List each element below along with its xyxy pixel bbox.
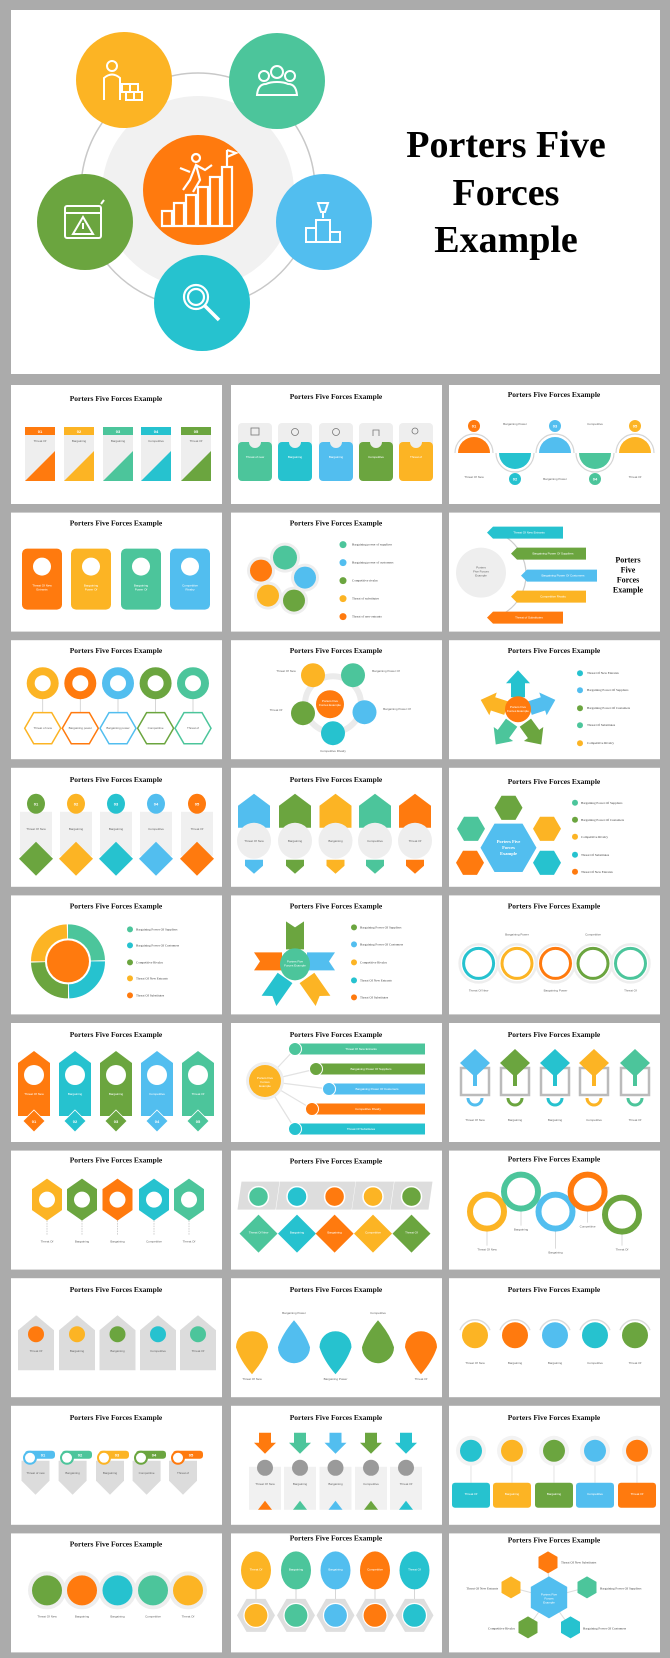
thumbnail 29: ellipses over hexagons: Bargaining (289, 1567, 304, 1571)
thumbnail 20: parallelograms and diamonds (231, 1151, 442, 1270)
thumbnail 17: horizontal bars: Competitive Rivalry (355, 1107, 381, 1111)
thumbnail 16: tall arrow cards: 03 (114, 1119, 119, 1124)
thumbnail 26: down arrows: Porters Five Forces Example (290, 1413, 383, 1422)
thumbnail 1: numbered cards: Bargaining (72, 439, 87, 443)
thumbnail 16: tall arrow cards: 05 (196, 1119, 201, 1124)
thumbnail 12: hexagon cluster: Forces (502, 845, 515, 850)
thumbnail 25: tags: Porters Five Forces Example (70, 1413, 163, 1422)
thumbnail 10: numbers and diamonds (11, 768, 222, 887)
thumbnail 27: circles over boxes (449, 1406, 660, 1525)
thumbnail 16: tall arrow cards: 02 (73, 1119, 78, 1124)
thumbnail 12: hexagon cluster: Porters Five (497, 839, 520, 844)
thumbnail 21: overlapping thick rings: Threat Of (616, 1248, 629, 1252)
thumbnail 9: arrows around center: Threat Of New Entrants (587, 671, 619, 675)
thumbnail 26: down arrows: Threat Of New (255, 1482, 276, 1486)
thumbnail 6: arrow banners: Competitive Rivalry (540, 595, 566, 599)
thumbnail 16: tall arrow cards: 01 (32, 1119, 37, 1124)
thumbnail 28: haloed circles: Bargaining (75, 1614, 90, 1618)
thumbnail 25: tags: 05 (189, 1452, 194, 1457)
thumbnail 1: numbered cards: Porters Five Forces Example (70, 394, 163, 403)
thumbnail 18: diamonds over frames: Threat Of New (465, 1118, 486, 1122)
thumbnail 23: drops: Competitive (370, 1311, 386, 1315)
thumbnail 16: tall arrow cards: Competitive (149, 1092, 165, 1096)
circle: rivalry podium (276, 174, 372, 270)
thumbnail 11: up pentagons: Competitive (367, 839, 383, 843)
thumbnail 21: overlapping thick rings: Bargaining (514, 1228, 529, 1232)
thumbnail 14: ribbon star: Competitive Rivalry (360, 960, 387, 964)
thumbnail 1: numbered cards: Threat Of (34, 439, 47, 443)
thumbnail 30: hexagon network: Forces (544, 1596, 554, 1600)
thumbnail 4: four rounded cards: Porters Five Forces Example (70, 519, 163, 528)
thumbnail 1: numbered cards: Threat Of (190, 439, 203, 443)
thumbnail 4: four rounded cards: Threat Of New (32, 584, 53, 588)
thumbnail 22: gray houses: Bargaining (70, 1349, 85, 1353)
thumbnail 25: tags: Threat of new (26, 1471, 46, 1475)
thumbnail 8: central circle: Porters Five (322, 699, 338, 703)
thumbnail 8: central circle: Bargaining Power Of (372, 669, 400, 673)
thumbnail 27: circles over boxes: Threat Of (465, 1492, 478, 1496)
thumbnail 4: four rounded cards: Competitive (182, 584, 198, 588)
thumbnail 3: wave: Bargaining Power (543, 477, 567, 481)
thumbnail 15: outlined rings: Threat Of (624, 988, 637, 992)
thumbnail 21: overlapping thick rings: Threat Of New (477, 1248, 498, 1252)
thumbnail 13: donut chart: Threat Of Substitutes (136, 993, 165, 997)
thumbnail 14: ribbon star: Threat Of New Entrants (360, 978, 392, 982)
thumbnail 7: rings with hexagons: Bargaining power (106, 726, 130, 730)
thumbnail 8: central circle: Porters Five Forces Example (290, 646, 383, 655)
thumbnail 10: numbers and diamonds: 01 (34, 801, 39, 806)
thumbnail 24: circles with labels (449, 1278, 660, 1397)
thumbnail 23: drops: Threat Of (415, 1377, 428, 1381)
thumbnail 6: arrow banners: Forces (617, 576, 639, 585)
thumbnail 23: drops: Threat Of New (242, 1377, 263, 1381)
thumbnail 5: cluster with legend: Bargaining power of customers (352, 561, 394, 565)
thumbnail 29: ellipses over hexagons: Threat Of (408, 1567, 421, 1571)
thumbnail 6: arrow banners: Bargaining Power Of Suppliers (532, 552, 574, 556)
thumbnail 6: arrow banners (449, 513, 660, 632)
thumbnail 11: up pentagons: Threat Of New (244, 839, 265, 843)
thumbnail 30: hexagon network: Example (543, 1600, 555, 1604)
thumbnail 6: arrow banners: Threat of Substitutes (515, 616, 543, 620)
thumbnail 13: donut chart: Bargaining Power Of Suppliers (136, 927, 178, 931)
thumbnail 10: numbers and diamonds: 04 (154, 801, 159, 806)
thumbnail 3: wave: Threat Of (629, 475, 642, 479)
hero panel: Example (434, 219, 578, 261)
thumbnail 19: vertical hexagons: Threat Of (183, 1240, 196, 1244)
thumbnail 28: haloed circles: Threat Of (182, 1614, 195, 1618)
thumbnail 23: drops: Bargaining Power (324, 1377, 347, 1381)
thumbnail 5: cluster with legend: Competitive rivalry (352, 579, 378, 583)
thumbnail 23: drops: Porters Five Forces Example (290, 1285, 383, 1294)
thumbnail 21: overlapping thick rings (449, 1151, 660, 1270)
thumbnail 14: ribbon star: Porters Five Forces Example (290, 901, 383, 910)
thumbnail 20: parallelograms and diamonds: Bargaining (290, 1231, 305, 1235)
thumbnail 16: tall arrow cards: Porters Five Forces Example (70, 1030, 163, 1039)
thumbnail 18: diamonds over frames: Bargaining (508, 1118, 523, 1122)
thumbnail 18: diamonds over frames: Bargaining (548, 1118, 563, 1122)
thumbnail 19: vertical hexagons (11, 1151, 222, 1270)
thumbnail 2: notched cards: Threat of new (246, 455, 265, 459)
thumbnail 9: arrows around center: Competitive Rivalry (587, 741, 614, 745)
thumbnail 12: hexagon cluster: Example (500, 851, 517, 856)
thumbnail 15: outlined rings (449, 895, 660, 1014)
thumbnail 17: horizontal bars: Forces (260, 1080, 270, 1084)
thumbnail 16: tall arrow cards: Threat Of (192, 1092, 205, 1096)
thumbnail 4: four rounded cards: Bargaining (84, 584, 99, 588)
thumbnail 15: outlined rings: Bargaining Power (544, 988, 567, 992)
thumbnail 6: arrow banners: Five Forces (473, 570, 489, 574)
thumbnail 12: hexagon cluster: Competitive Rivalry (581, 835, 608, 839)
thumbnail 13: donut chart: Threat Of New Entrants (136, 976, 168, 980)
thumbnail 3: wave: 04 (593, 476, 598, 482)
thumbnail 23: drops: Bargaining Power (282, 1311, 306, 1315)
thumbnail 16: tall arrow cards: 04 (155, 1119, 160, 1124)
thumbnail 6: arrow banners: Threat Of New Entrants (513, 531, 545, 535)
outer ring (81, 73, 315, 307)
thumbnail 29: ellipses over hexagons: Porters Five Forces Example (290, 1533, 383, 1542)
thumbnail 1: numbered cards: Bargaining (111, 439, 126, 443)
circle: substitutes search (154, 255, 250, 351)
thumbnail 8: central circle: Threat Of New (276, 669, 297, 673)
thumbnail 24: circles with labels: Threat Of (629, 1361, 642, 1365)
thumbnail 24: circles with labels: Threat Of New (465, 1361, 486, 1365)
thumbnail 4: four rounded cards: Entrants (36, 588, 48, 592)
thumbnail 5: cluster with legend (231, 513, 442, 632)
thumbnail 20: parallelograms and diamonds: Threat Of New (249, 1231, 269, 1235)
thumbnail 14: ribbon star: Forces Example (284, 963, 306, 967)
thumbnail 3: wave: 01 (472, 424, 477, 428)
thumbnail 4: four rounded cards: Power Of (85, 588, 97, 592)
thumbnail 22: gray houses: Porters Five Forces Example (70, 1285, 163, 1294)
thumbnail 8: central circle: Competitive Rivalry (320, 749, 346, 753)
circle: new entrants (76, 32, 172, 128)
thumbnail 25: tags: Bargaining (65, 1471, 80, 1475)
thumbnail 9: arrows around center (449, 640, 660, 759)
thumbnail 22: gray houses: Competitive (150, 1349, 166, 1353)
thumbnail 18: diamonds over frames: Competitive (586, 1118, 602, 1122)
thumbnail 11: up pentagons: Bargaining (288, 839, 303, 843)
thumbnail 14: ribbon star: Bargaining Power Of Customers (360, 942, 404, 946)
inner gray disk (102, 96, 294, 288)
thumbnail 29: ellipses over hexagons: Bargaining (328, 1567, 343, 1571)
thumbnail 5: cluster with legend: Threat of substitutes (352, 597, 380, 601)
thumbnail 29: ellipses over hexagons (231, 1533, 442, 1652)
thumbnail 28: haloed circles: Bargaining (110, 1614, 125, 1618)
thumbnail 19: vertical hexagons: Competitive (146, 1240, 162, 1244)
thumbnail 6: arrow banners: Five (621, 566, 636, 575)
thumbnail 3: wave: 05 (633, 424, 638, 428)
thumbnail 30: hexagon network: Porters Five (541, 1592, 557, 1596)
thumbnail 4: four rounded cards (11, 513, 222, 632)
thumbnail 10: numbers and diamonds: Bargaining (69, 827, 84, 831)
thumbnail 14: ribbon star: Bargaining Power Of Suppliers (360, 925, 402, 929)
thumbnail 18: diamonds over frames: Threat Of (629, 1118, 642, 1122)
thumbnail 7: rings with hexagons: Threat of (187, 726, 199, 730)
thumbnail 19: vertical hexagons: Porters Five Forces Example (70, 1156, 163, 1165)
thumbnail 13: donut chart: Bargaining Power Of Customers (136, 943, 180, 947)
thumbnail 3: wave: Competitive (587, 422, 603, 426)
thumbnail 4: four rounded cards: Bargaining (134, 584, 149, 588)
circle: threat warning (37, 174, 133, 270)
thumbnail 7: rings with hexagons: Bargaining power (69, 726, 92, 730)
thumbnail 13: donut chart: Competitive Rivalry (136, 960, 163, 964)
thumbnail 24: circles with labels: Porters Five Forces Example (508, 1285, 601, 1294)
thumbnail 8: central circle (231, 640, 442, 759)
thumbnail 10: numbers and diamonds: 03 (114, 801, 119, 806)
thumbnail 22: gray houses: Bargaining (110, 1349, 125, 1353)
thumbnail 16: tall arrow cards: Bargaining (109, 1092, 124, 1096)
thumbnail 10: numbers and diamonds: Bargaining (109, 827, 124, 831)
thumbnail 30: hexagon network: Bargaining Power Of Suppliers (600, 1586, 642, 1590)
thumbnail 16: tall arrow cards: Bargaining (68, 1092, 83, 1096)
thumbnail 10: numbers and diamonds: Porters Five Forces Example (70, 775, 163, 784)
thumbnail 1: numbered cards: 01 (38, 429, 43, 434)
thumbnail 1: numbered cards: Competitive (148, 439, 164, 443)
thumbnail 3: wave: 03 (553, 424, 558, 428)
thumbnail 2: notched cards: Competitive (368, 455, 384, 459)
thumbnail 19: vertical hexagons: Bargaining (110, 1240, 125, 1244)
thumbnail 2: notched cards: Porters Five Forces Example (290, 392, 383, 401)
thumbnail 30: hexagon network: Bargaining Power Of Customers (583, 1626, 627, 1630)
thumbnail 29: ellipses over hexagons: Threat Of (250, 1567, 263, 1571)
thumbnail 10: numbers and diamonds: Threat Of New (26, 827, 47, 831)
thumbnail 24: circles with labels: Bargaining (508, 1361, 523, 1365)
thumbnail 11: up pentagons: Threat Of (409, 839, 422, 843)
thumbnail 25: tags: Threat of (177, 1471, 189, 1475)
thumbnail 29: ellipses over hexagons: Competitive (367, 1567, 383, 1571)
thumbnail 9: arrows around center: Bargaining Power Of Customers (587, 706, 631, 710)
thumbnail 16: tall arrow cards (11, 1023, 222, 1142)
thumbnail 24: circles with labels: Bargaining (548, 1361, 563, 1365)
thumbnail 28: haloed circles: Threat Of New (37, 1614, 58, 1618)
thumbnail 6: arrow banners: Example (475, 574, 487, 578)
circle: customers (229, 33, 325, 129)
thumbnail 8: central circle: Forces Example (319, 703, 341, 707)
thumbnail 6: arrow banners: Porters (476, 566, 486, 570)
thumbnail 15: outlined rings: Competitive (585, 932, 601, 936)
thumbnail 25: tags: Competitive (139, 1471, 155, 1475)
thumbnail 9: arrows around center: Bargaining Power Of Suppliers (587, 688, 629, 692)
thumbnail 30: hexagon network: Threat Of New Substitutes (561, 1560, 597, 1564)
thumbnail 26: down arrows (231, 1406, 442, 1525)
thumbnail 25: tags: 01 (41, 1452, 46, 1457)
thumbnail 3: wave: 02 (513, 476, 518, 482)
thumbnail 17: horizontal bars: Threat Of Substitutes (347, 1127, 376, 1131)
thumbnail 20: parallelograms and diamonds: Competitive (365, 1231, 381, 1235)
thumbnail 17: horizontal bars: Bargaining Power Of Suppliers (350, 1067, 392, 1071)
thumbnail 1: numbered cards: 03 (116, 429, 121, 434)
thumbnail 22: gray houses: Threat Of (192, 1349, 205, 1353)
thumbnail 25: tags (11, 1406, 222, 1525)
thumbnail 9: arrows around center: Porters Five (510, 705, 526, 709)
thumbnail 14: ribbon star (231, 895, 442, 1014)
thumbnail 4: four rounded cards: Rivalry (185, 588, 195, 592)
thumbnail 22: gray houses (11, 1278, 222, 1397)
thumbnail 11: up pentagons: Bargaining (328, 839, 343, 843)
thumbnail 3: wave: Bargaining Power (503, 422, 527, 426)
thumbnail 20: parallelograms and diamonds: Porters Five Forces Example (290, 1157, 383, 1166)
thumbnail 10: numbers and diamonds: 05 (195, 801, 200, 806)
thumbnail 25: tags: 03 (115, 1452, 120, 1457)
center circle: growth icon (143, 135, 253, 245)
hero title: Porters Five (406, 124, 606, 166)
thumbnail 2: notched cards (231, 385, 442, 504)
thumbnail 20: parallelograms and diamonds: Threat Of (405, 1231, 418, 1235)
thumbnail 20: parallelograms and diamonds: Bargaining (327, 1231, 342, 1235)
thumbnail 3: wave: Threat Of New (464, 475, 485, 479)
thumbnail 15: outlined rings: Porters Five Forces Example (508, 901, 601, 910)
thumbnail 13: donut chart (11, 895, 222, 1014)
thumbnail 30: hexagon network: Porters Five Forces Example (508, 1535, 601, 1544)
thumbnail 17: horizontal bars (231, 1023, 442, 1142)
thumbnail 11: up pentagons: Porters Five Forces Example (290, 775, 383, 784)
thumbnail 17: horizontal bars: Bargaining Power Of Customers (355, 1087, 399, 1091)
thumbnail 12: hexagon cluster (449, 768, 660, 887)
thumbnail 12: hexagon cluster: Bargaining Power Of Customers (581, 818, 625, 822)
thumbnail 12: hexagon cluster: Bargaining Power Of Suppliers (581, 801, 623, 805)
thumbnail 9: arrows around center: Forces Example (507, 709, 529, 713)
thumbnail 26: down arrows: Bargaining (328, 1482, 343, 1486)
thumbnail 26: down arrows: Competitive (363, 1482, 379, 1486)
thumbnail 18: diamonds over frames (449, 1023, 660, 1142)
thumbnail 10: numbers and diamonds: 02 (74, 801, 79, 806)
thumbnail 30: hexagon network: Threat Of New Entrants (466, 1586, 499, 1590)
thumbnail 15: outlined rings: Threat Of New (469, 988, 489, 992)
thumbnail 9: arrows around center: Threat Of Substitutes (587, 723, 616, 727)
thumbnail 2: notched cards: Bargaining (329, 455, 344, 459)
thumbnail 5: cluster with legend: Porters Five Forces Example (290, 519, 383, 528)
thumbnail 12: hexagon cluster: Porters Five Forces Example (508, 777, 601, 786)
thumbnail 27: circles over boxes: Porters Five Forces Example (508, 1413, 601, 1422)
thumbnail 28: haloed circles: Competitive (145, 1614, 161, 1618)
thumbnail 17: horizontal bars: Example (259, 1084, 271, 1088)
thumbnail 17: horizontal bars: Porters Five Forces Example (290, 1030, 383, 1039)
thumbnail 12: hexagon cluster: Threat Of Substitutes (581, 853, 610, 857)
thumbnail 3: wave (449, 385, 660, 504)
thumbnail 9: arrows around center: Porters Five Forces Example (508, 646, 601, 655)
thumbnail 7: rings with hexagons (11, 640, 222, 759)
thumbnail 28: haloed circles (11, 1533, 222, 1652)
thumbnail 10: numbers and diamonds: Threat Of (191, 827, 204, 831)
thumbnail 22: gray houses: Threat Of (30, 1349, 43, 1353)
thumbnail 21: overlapping thick rings: Competitive (580, 1225, 596, 1229)
thumbnail 1: numbered cards (11, 385, 222, 504)
thumbnail 8: central circle: Bargaining Power Of (383, 707, 411, 711)
thumbnail 17: horizontal bars: Porters Five (257, 1076, 273, 1080)
thumbnail 26: down arrows: Threat Of (400, 1482, 413, 1486)
thumbnail 7: rings with hexagons: Porters Five Forces Example (70, 646, 163, 655)
thumbnail 21: overlapping thick rings: Bargaining (548, 1251, 563, 1255)
thumbnail 30: hexagon network (449, 1533, 660, 1652)
thumbnail 5: cluster with legend: Threat of new entrants (352, 615, 382, 619)
hero panel (11, 10, 660, 374)
hero panel: Forces (453, 172, 559, 214)
thumbnail 11: up pentagons (231, 768, 442, 887)
thumbnail 2: notched cards: Bargaining (288, 455, 303, 459)
thumbnail 6: arrow banners: Bargaining Power Of Customers (541, 574, 585, 578)
thumbnail 1: numbered cards: 05 (194, 429, 199, 434)
thumbnail 7: rings with hexagons: Competitive (148, 726, 164, 730)
thumbnail 21: overlapping thick rings: Porters Five Forces Example (508, 1155, 601, 1164)
thumbnail 27: circles over boxes: Bargaining (505, 1492, 520, 1496)
thumbnail 27: circles over boxes: Bargaining (547, 1492, 562, 1496)
thumbnail 27: circles over boxes: Competitive (587, 1492, 603, 1496)
thumbnail 25: tags: 04 (152, 1452, 157, 1457)
thumbnail 10: numbers and diamonds: Competitive (148, 827, 164, 831)
thumbnail 19: vertical hexagons: Bargaining (75, 1240, 90, 1244)
thumbnail 15: outlined rings: Bargaining Power (505, 932, 529, 936)
thumbnail 25: tags: Bargaining (103, 1471, 118, 1475)
thumbnail 1: numbered cards: 04 (154, 429, 159, 434)
thumbnail 23: drops (231, 1278, 442, 1397)
thumbnail 6: arrow banners: Example (613, 586, 644, 595)
thumbnail 18: diamonds over frames: Porters Five Forces Example (508, 1030, 601, 1039)
thumbnail 14: ribbon star: Threat Of Substitutes (360, 995, 389, 999)
thumbnail 4: four rounded cards: Power Of (135, 588, 147, 592)
thumbnail 28: haloed circles: Porters Five Forces Example (70, 1539, 163, 1548)
thumbnail 1: numbered cards: 02 (77, 429, 82, 434)
thumbnail 12: hexagon cluster: Threat Of New Entrants (581, 870, 613, 874)
thumbnail 17: horizontal bars: Threat Of New Entrants (345, 1047, 377, 1051)
thumbnail 14: ribbon star: Porters Five (287, 959, 303, 963)
thumbnail 30: hexagon network: Competitive Rivalry (488, 1626, 515, 1630)
thumbnail 5: cluster with legend: Bargaining power of suppliers (352, 543, 393, 547)
thumbnail 24: circles with labels: Competitive (587, 1361, 603, 1365)
thumbnail 16: tall arrow cards: Threat Of New (24, 1092, 45, 1096)
thumbnail 26: down arrows: Bargaining (293, 1482, 308, 1486)
thumbnail 27: circles over boxes: Threat Of (631, 1492, 644, 1496)
thumbnail 2: notched cards: Threat of (410, 455, 422, 459)
thumbnail 8: central circle: Threat Of (270, 708, 283, 712)
thumbnail 3: wave: Porters Five Forces Example (508, 390, 601, 399)
thumbnail 7: rings with hexagons: Threat of new (34, 726, 53, 730)
thumbnail 13: donut chart: Porters Five Forces Example (70, 901, 163, 910)
thumbnail 25: tags: 02 (78, 1452, 83, 1457)
thumbnail 6: arrow banners: Porters (615, 556, 641, 565)
thumbnail 19: vertical hexagons: Threat Of (41, 1240, 54, 1244)
